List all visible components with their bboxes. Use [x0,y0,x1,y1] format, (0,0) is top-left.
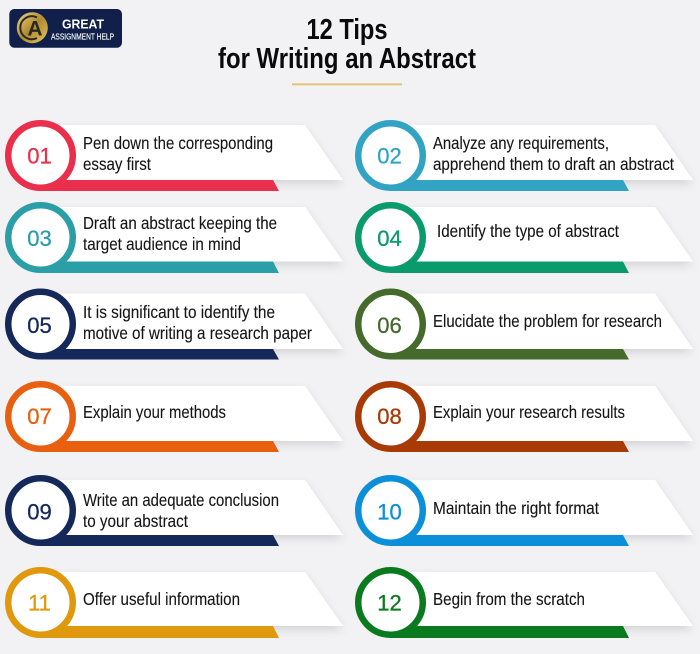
tip 07 [8,384,343,452]
tip 03 [8,205,343,273]
logo text: ASSIGNMENT HELP [51,31,114,41]
tip 11 [8,570,343,638]
logo [9,9,122,48]
tip 02: 02 [377,144,402,168]
tip 10: Maintain the right format [433,498,599,518]
tip 12 [358,570,693,638]
tip 11: Offer useful information [83,589,240,609]
tip 09: to your abstract [83,511,188,531]
tip 01: essay first [83,154,151,174]
tip 07: Explain your methods [83,402,226,422]
tip 02: Analyze any requirements, [433,133,609,153]
logo text: GREAT [62,16,104,32]
tip 03: Draft an abstract keeping the [83,213,277,233]
tip 09: 09 [27,500,52,524]
tip 01: Pen down the corresponding [83,133,273,153]
tip 09: Write an adequate conclusion [83,490,279,510]
tip 08 [358,384,693,452]
tip 05 [8,292,343,360]
tip 06: Elucidate the problem for research [433,311,662,331]
icon: logo emblem: A [27,18,43,40]
title [218,14,476,75]
tip 01 [8,123,343,191]
tip 11: 11 [28,590,51,616]
tip 01: 01 [27,144,52,168]
title: for Writing an Abstract [218,43,476,75]
tip 05: It is significant to identify the [83,302,275,322]
tip 12: Begin from the scratch [433,589,585,609]
tip 02 [358,123,693,191]
tip 06: 06 [377,313,402,338]
tip 08: Explain your research results [433,402,625,422]
title: 12 Tips [306,14,388,46]
tip 08: 08 [377,404,402,429]
tip 10: 10 [377,500,402,524]
tip 03: target audience in mind [83,234,241,254]
tip 03: 03 [27,226,52,251]
tip 04 [358,205,693,273]
tip 05: 05 [27,313,52,338]
tip 07: 07 [27,404,52,429]
tip 06 [358,292,693,360]
logo text [51,16,114,41]
tip 12: 12 [377,590,402,616]
tip 04: 04 [377,226,402,251]
tip 09 [8,478,343,546]
tip 04: Identify the type of abstract [437,221,619,241]
tip 05: motive of writing a research paper [83,323,312,343]
divider [292,83,402,85]
tip 10 [358,478,693,546]
